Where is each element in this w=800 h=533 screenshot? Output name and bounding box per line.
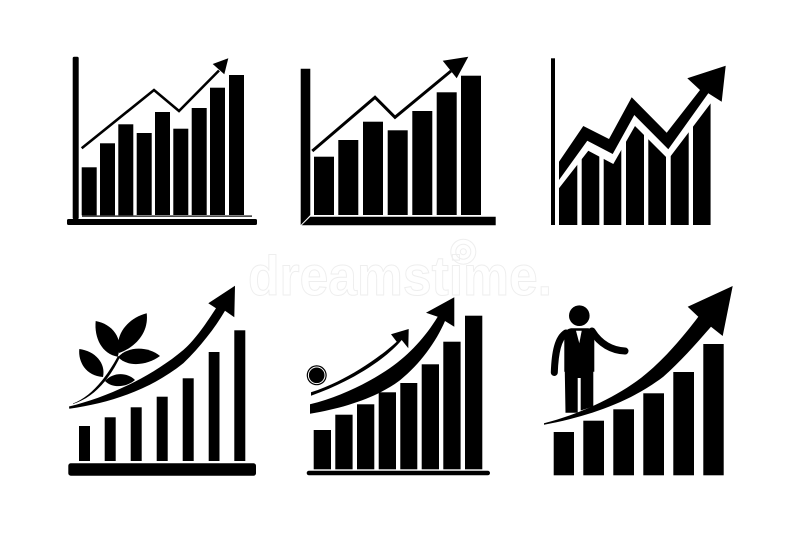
bars clipped by zigzag xyxy=(559,90,711,225)
base xyxy=(307,471,490,475)
plant xyxy=(73,313,160,404)
infographic canvas xyxy=(67,56,733,476)
y axis xyxy=(301,69,310,225)
icon: bar chart with chamfered axes xyxy=(301,57,496,225)
base xyxy=(302,217,496,225)
big arrow xyxy=(310,297,454,414)
icon: zigzag band arrow over bars xyxy=(551,58,726,225)
small arrow xyxy=(311,329,409,396)
y axis xyxy=(551,58,555,225)
watermark: dreamstime. xyxy=(248,244,552,307)
base xyxy=(68,463,256,476)
icon: plant growth chart xyxy=(68,286,256,476)
coin xyxy=(307,365,327,385)
thin line under bars xyxy=(82,216,252,217)
bars xyxy=(314,76,481,215)
trend arrow xyxy=(312,57,468,151)
bars xyxy=(314,316,482,469)
icon: two arrows with coin chart xyxy=(307,297,490,475)
curved arrow xyxy=(69,286,235,409)
bars xyxy=(79,330,245,461)
icon: businessman on growth arrow xyxy=(544,286,733,475)
businessman xyxy=(554,305,625,413)
bars xyxy=(82,75,244,215)
base line xyxy=(67,219,257,225)
y axis xyxy=(73,57,79,219)
trend arrow xyxy=(82,58,228,148)
icon: bar chart with thin arrow and base line xyxy=(67,57,257,225)
zigzag arrow xyxy=(559,66,726,180)
bars xyxy=(554,344,724,475)
curved arrow xyxy=(544,286,733,425)
